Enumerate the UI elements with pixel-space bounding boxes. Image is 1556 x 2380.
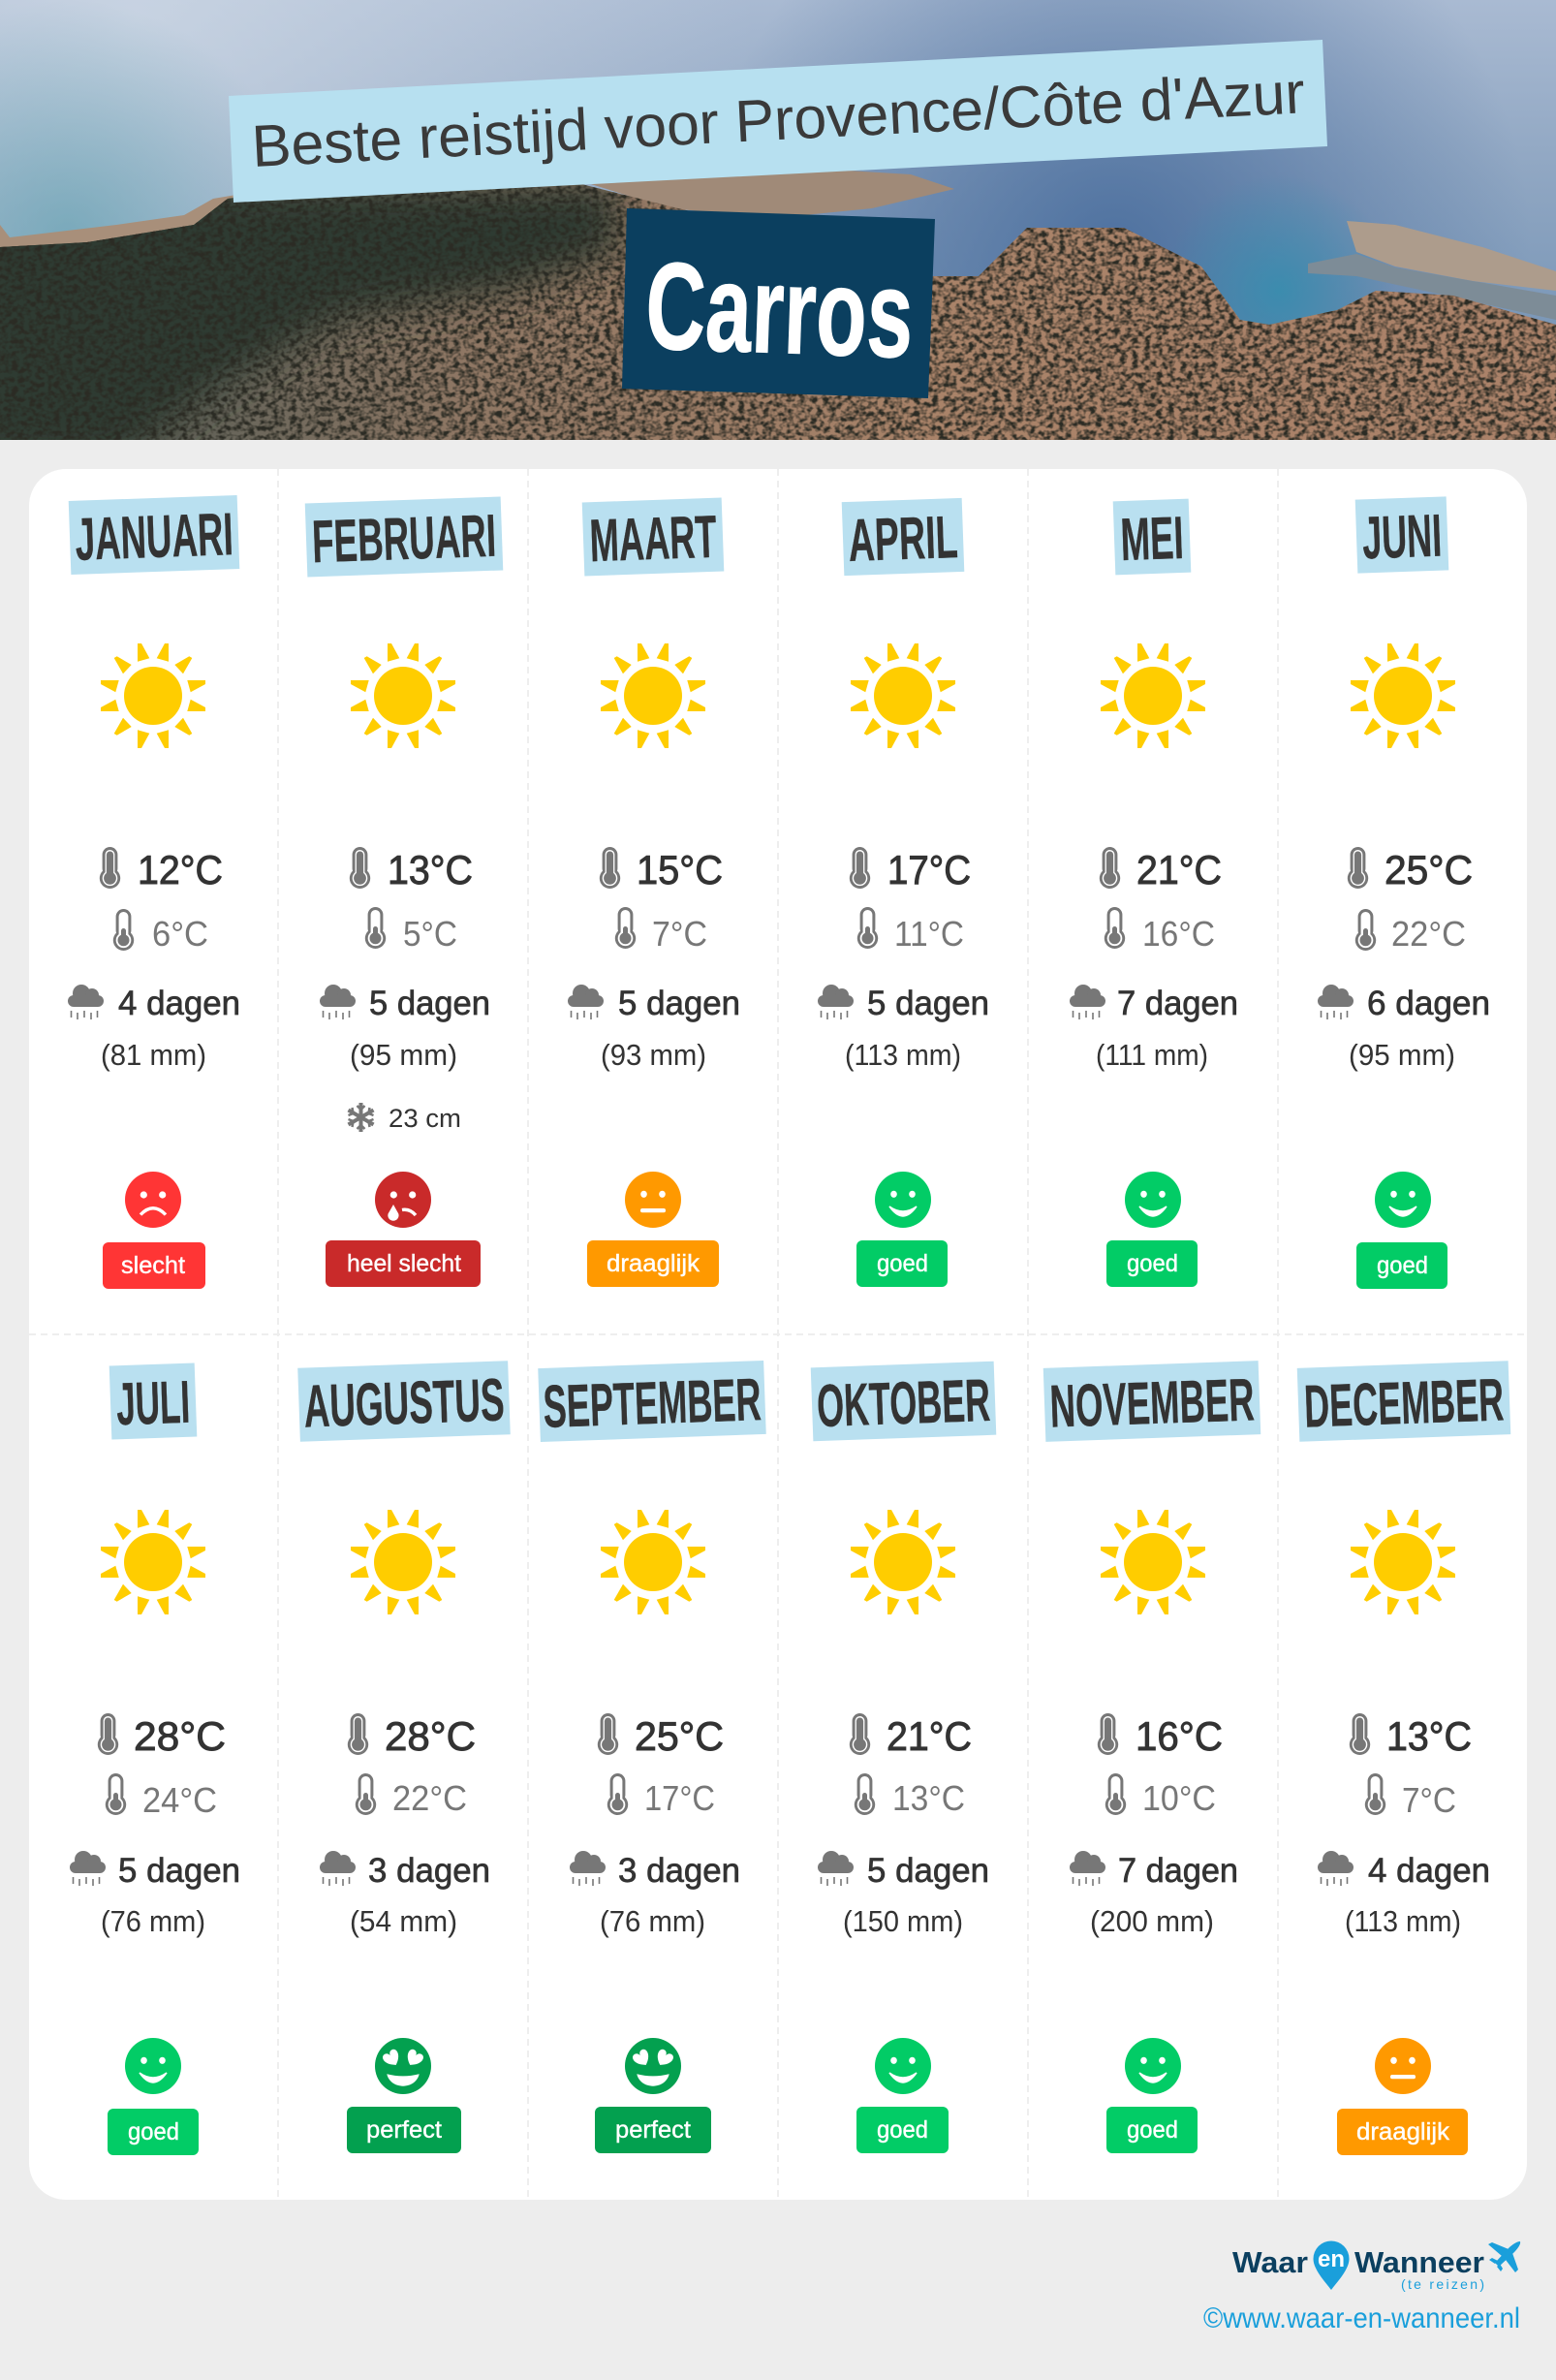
rating badge: heel slecht xyxy=(326,1240,481,1287)
min temperature: 24°C xyxy=(142,1780,217,1820)
max temperature xyxy=(350,847,473,892)
min temperature xyxy=(356,1773,467,1818)
min temperature xyxy=(607,1773,715,1818)
month label: februari xyxy=(305,496,503,578)
min temperature: 5°C xyxy=(403,914,457,954)
rating badge: perfect xyxy=(595,2107,711,2153)
rating badge: perfect: perfect xyxy=(615,2116,691,2144)
min temperature: 17°C xyxy=(644,1778,715,1818)
min temperature xyxy=(857,907,964,954)
max temperature xyxy=(100,847,223,892)
rating face: perfect xyxy=(375,2038,431,2094)
rating badge: draaglijk: draaglijk xyxy=(607,1250,700,1277)
max temperature: 25°C xyxy=(1385,847,1473,892)
rating badge: slecht xyxy=(103,1242,205,1289)
icon: sun xyxy=(851,1510,955,1614)
min temperature xyxy=(1355,909,1466,954)
max temperature xyxy=(850,1713,972,1759)
month label: juni: JUNI xyxy=(1361,503,1443,572)
max temperature: 13°C xyxy=(388,847,473,892)
column: augustus xyxy=(297,1361,511,2153)
logo: Waar en Wanneer: Waar xyxy=(1232,2245,1308,2279)
rating face: heel slecht xyxy=(375,1172,431,1228)
min temperature: 7°C xyxy=(652,914,707,954)
rain days xyxy=(70,1851,240,1890)
rain days: 3 dagen xyxy=(618,1852,740,1890)
rainfall: (54 mm) xyxy=(350,1904,457,1938)
rating face: goed xyxy=(875,1172,931,1228)
rating face: perfect xyxy=(625,2038,681,2094)
rating badge: goed: goed xyxy=(877,2116,928,2144)
month label: juli xyxy=(109,1362,197,1440)
month label: november: NOVEMBER xyxy=(1048,1366,1256,1441)
month label: november xyxy=(1043,1361,1260,1442)
place name: Carros: Carros xyxy=(643,236,916,385)
rating badge: goed: goed xyxy=(877,1250,928,1277)
month label: april xyxy=(842,498,964,576)
month label: januari xyxy=(69,495,239,575)
max temperature xyxy=(1348,847,1473,892)
rain days: 5 dagen xyxy=(618,985,740,1022)
min temperature: 16°C xyxy=(1142,914,1215,954)
rating badge: perfect xyxy=(347,2107,461,2153)
month label: februari: FEBRUARI xyxy=(311,503,497,576)
rain days xyxy=(1318,1851,1490,1890)
month label: mei xyxy=(1113,499,1191,575)
icon: sun xyxy=(601,1510,705,1614)
column: november xyxy=(1043,1361,1260,2153)
month label: oktober: OKTOBER xyxy=(816,1367,991,1440)
column: april xyxy=(818,498,989,1287)
rain days: 5 dagen xyxy=(867,1852,989,1890)
rain days: 4 dagen xyxy=(118,985,240,1022)
max temperature: 25°C xyxy=(635,1713,724,1759)
rainfall: (76 mm) xyxy=(600,1904,705,1938)
min temperature: 6°C xyxy=(152,914,208,954)
column: januari xyxy=(68,495,240,1289)
rain days xyxy=(570,1851,740,1890)
rain days: 7 dagen xyxy=(1117,985,1238,1022)
month label: september xyxy=(538,1361,766,1442)
rating badge: perfect: perfect xyxy=(366,2116,442,2144)
min temperature: 13°C xyxy=(892,1778,965,1818)
rating badge: goed: goed xyxy=(1127,1250,1178,1277)
rating face: goed xyxy=(125,2038,181,2094)
rainfall: (111 mm) xyxy=(1096,1038,1208,1072)
max temperature: 21°C xyxy=(1136,847,1222,892)
max temperature: 12°C xyxy=(138,847,223,892)
rainfall: (93 mm) xyxy=(601,1038,706,1072)
max temperature xyxy=(850,847,971,892)
min temperature xyxy=(615,907,707,954)
icon: sun xyxy=(101,1510,205,1614)
column: september xyxy=(538,1361,766,2153)
rainfall: (81 mm) xyxy=(101,1038,206,1072)
rating face: goed xyxy=(1125,1172,1181,1228)
icon: sun xyxy=(1351,1510,1455,1614)
max temperature: 28°C xyxy=(385,1713,476,1759)
rain days: 4 dagen xyxy=(1368,1852,1490,1890)
rating badge: goed xyxy=(1106,2107,1198,2153)
logo: Waar en Wanneer: (te reizen) xyxy=(1401,2276,1484,2292)
min temperature xyxy=(113,909,208,954)
month label: mei: MEI xyxy=(1119,505,1185,574)
rain days xyxy=(818,1851,989,1890)
rain days: 3 dagen xyxy=(368,1852,490,1890)
rating badge: goed xyxy=(108,2109,199,2155)
rain days: 7 dagen xyxy=(1118,1852,1238,1890)
max temperature xyxy=(598,1713,724,1759)
rating badge: goed xyxy=(856,2107,949,2153)
icon: map pin with en: en xyxy=(1318,2246,1345,2272)
white card panel xyxy=(29,469,1527,2200)
title banner: Beste reistijd voor Provence/Côte d'Azur xyxy=(250,59,1306,179)
min temperature xyxy=(106,1773,217,1820)
max temperature xyxy=(1350,1713,1472,1759)
rain days: 5 dagen xyxy=(867,985,989,1022)
month label: maart xyxy=(582,498,724,576)
rating badge: goed: goed xyxy=(128,2118,179,2145)
column: december xyxy=(1297,1361,1510,2155)
icon: sun xyxy=(601,643,705,748)
rainfall: (95 mm) xyxy=(350,1038,457,1072)
icon: sun xyxy=(1351,643,1455,748)
rainfall: (76 mm) xyxy=(101,1904,205,1938)
rating badge: draaglijk: draaglijk xyxy=(1356,2118,1450,2145)
min temperature: 7°C xyxy=(1402,1780,1456,1820)
rating face: draaglijk xyxy=(625,1172,681,1228)
rain days: 5 dagen xyxy=(369,985,490,1022)
logo: Waar en Wanneer: Wanneer xyxy=(1354,2245,1484,2279)
rating face: draaglijk xyxy=(1375,2038,1431,2094)
month label: juni xyxy=(1355,496,1448,574)
max temperature xyxy=(1100,847,1222,892)
max temperature: 28°C xyxy=(134,1713,226,1759)
rating face: goed xyxy=(1125,2038,1181,2094)
column: oktober xyxy=(811,1362,996,2153)
column: mei xyxy=(1070,499,1238,1287)
rating badge: draaglijk xyxy=(587,1240,719,1287)
place name: Carros xyxy=(622,208,935,398)
min temperature xyxy=(1365,1773,1456,1820)
rain days xyxy=(320,1851,490,1890)
month label: oktober xyxy=(811,1362,996,1441)
column: juni xyxy=(1318,496,1490,1289)
icon: map pin with en xyxy=(1314,2240,1349,2290)
max temperature: 16°C xyxy=(1136,1713,1223,1759)
month label: april: APRIL xyxy=(847,504,959,575)
rain days: 5 dagen xyxy=(118,1852,240,1890)
rating face: goed xyxy=(1375,1172,1431,1228)
column: juli xyxy=(70,1362,240,2155)
rain days xyxy=(1070,1851,1238,1890)
month label: januari: JANUARI xyxy=(74,501,234,574)
rating badge: draaglijk xyxy=(1337,2109,1468,2155)
min temperature xyxy=(1105,907,1215,954)
month label: juli: JULI xyxy=(115,1369,191,1438)
snowfall xyxy=(349,1103,461,1133)
rating badge: goed: goed xyxy=(1127,2116,1178,2144)
rain days: 6 dagen xyxy=(1367,985,1490,1022)
month label: september: SEPTEMBER xyxy=(542,1366,762,1441)
icon: sun xyxy=(1101,1510,1205,1614)
icon: sun xyxy=(851,643,955,748)
icon: sun xyxy=(1101,643,1205,748)
icon: sun xyxy=(351,1510,455,1614)
min temperature xyxy=(855,1773,965,1818)
month label: augustus: AUGUSTUS xyxy=(302,1366,506,1441)
month label: augustus xyxy=(297,1361,511,1442)
rating badge: goed xyxy=(1356,1242,1447,1289)
min temperature: 11°C xyxy=(894,914,964,954)
min temperature xyxy=(365,907,457,954)
min temperature: 22°C xyxy=(392,1778,467,1818)
min temperature xyxy=(1105,1773,1216,1818)
max temperature: 17°C xyxy=(887,847,971,892)
rainfall: (200 mm) xyxy=(1090,1904,1214,1938)
rating face: slecht xyxy=(125,1172,181,1228)
website credit: ©www.waar-en-wanneer.nl xyxy=(1203,2302,1520,2334)
header photo: aerial view of coast xyxy=(0,0,1556,465)
rating badge: goed xyxy=(856,1240,948,1287)
rating badge: goed: goed xyxy=(1377,1252,1428,1279)
rating badge: slecht: slecht xyxy=(121,1252,185,1279)
rating face: goed xyxy=(875,2038,931,2094)
max temperature: 21°C xyxy=(887,1713,972,1759)
month label: maart: MAART xyxy=(588,504,718,575)
rainfall: (113 mm) xyxy=(845,1038,961,1072)
rainfall: (150 mm) xyxy=(843,1904,963,1938)
rainfall: (113 mm) xyxy=(1345,1904,1461,1938)
icon: airplane xyxy=(1488,2241,1520,2272)
min temperature: 22°C xyxy=(1391,914,1466,954)
rating badge: goed xyxy=(1106,1240,1198,1287)
logo: Waar en Wanneer xyxy=(1232,2240,1520,2292)
max temperature: 15°C xyxy=(637,847,723,892)
column: maart xyxy=(568,498,740,1287)
snowfall: 23 cm xyxy=(389,1104,461,1133)
column: februari xyxy=(305,496,503,1287)
icon: sun xyxy=(351,643,455,748)
rainfall: (95 mm) xyxy=(1349,1038,1455,1072)
max temperature: 13°C xyxy=(1386,1713,1472,1759)
rating badge: heel slecht: heel slecht xyxy=(347,1250,461,1277)
icon: sun xyxy=(101,643,205,748)
max temperature xyxy=(1098,1713,1223,1759)
min temperature: 10°C xyxy=(1142,1778,1216,1818)
max temperature xyxy=(600,847,723,892)
